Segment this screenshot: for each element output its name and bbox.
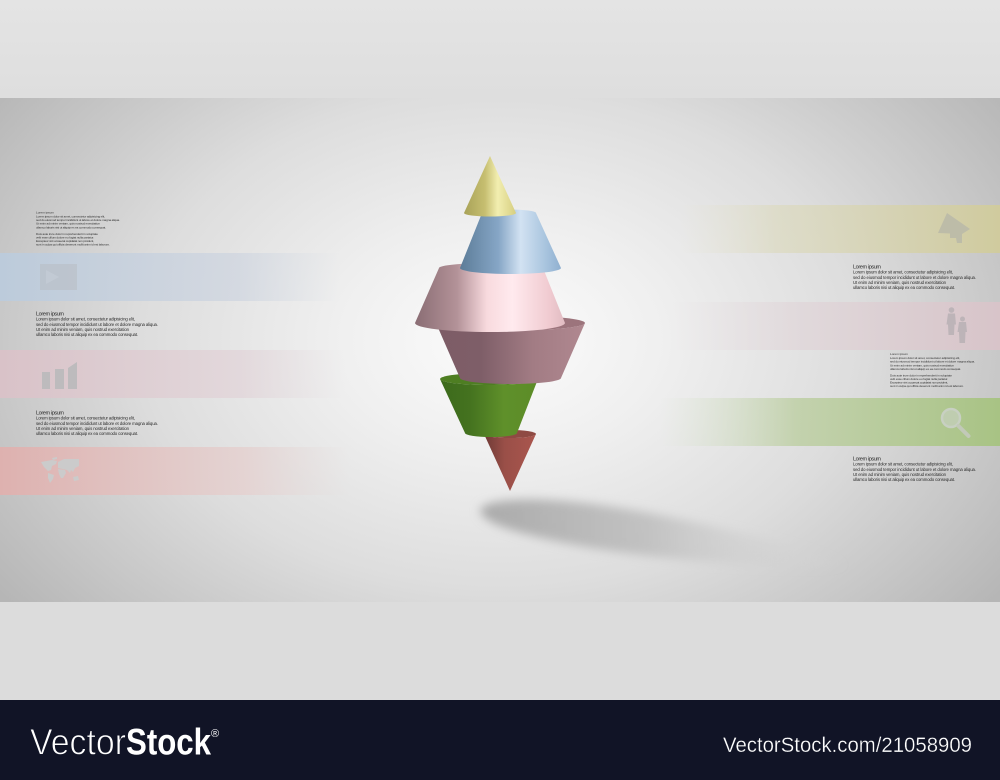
text block: left top small: sed do eiusmod tempor incididunt ut labore et dolore magna aliqua. <box>36 218 120 222</box>
stacked cone diagram <box>415 156 585 491</box>
segment: yellow tip <box>464 156 516 217</box>
text block: left lower: Lorem ipsum dolor sit amet, consectetur adipisicing elit, <box>36 416 135 421</box>
cast shadow <box>480 499 850 567</box>
text block: left lower: Ut enim ad minim veniam, quis nostrud exercitation <box>36 426 130 431</box>
text block: left top small: sunt in culpa qui officia deserunt mollit anim id est laborum. <box>36 242 110 246</box>
text block: right upper: Lorem ipsum dolor sit amet, consectetur adipisicing elit, <box>853 270 953 275</box>
main panel background <box>0 98 1000 602</box>
text block: left lower <box>36 410 158 436</box>
band: left red <box>0 447 350 495</box>
text block: right upper: sed do eiusmod tempor incididunt ut labore et dolore magna aliqua. <box>853 275 976 280</box>
icon: megaphone <box>938 213 970 243</box>
text block: right middle small: Excepteur sint occaecat cupidatat non proident, <box>890 380 948 384</box>
segment: pink <box>415 263 565 332</box>
text block: right lower: ullamco laboris nisi ut aliquip ex ea commodo consequat. <box>853 477 955 482</box>
icon: presentation screen <box>40 264 77 290</box>
icon: bar chart <box>42 362 77 389</box>
footer logo <box>30 722 219 762</box>
segment: mauve <box>436 316 585 384</box>
text block: left top small: velit esse cillum dolore eu fugiat nulla pariatur. <box>36 236 94 240</box>
segment: blue <box>460 210 561 274</box>
text block: right lower <box>853 456 976 482</box>
top margin strip <box>0 0 1000 98</box>
text block: left top small: Lorem ipsum <box>36 210 54 214</box>
segment: green <box>440 373 538 437</box>
text block: right upper <box>853 264 976 290</box>
footer bar <box>0 700 1000 780</box>
text block: left middle: ullamco laboris nisi ut aliquip ex ea commodo consequat. <box>36 332 138 337</box>
band: left blue <box>0 253 340 301</box>
text block: left lower: ullamco laboris nisi ut aliquip ex ea commodo consequat. <box>36 431 138 436</box>
text block: right middle small: Ut enim ad minim veniam, quis nostrud exercitation <box>890 363 954 367</box>
footer logo: Stock <box>126 722 211 762</box>
text block: left top small: Lorem ipsum dolor sit amet, consectetur adipisicing elit, <box>36 214 105 218</box>
text block: right middle small: ullamco laboris nisi ut aliquip ex ea commodo consequat. <box>890 367 961 371</box>
text block: left top small: Duis aute irure dolor in reprehenderit in voluptate <box>36 232 98 236</box>
text block: right upper: Ut enim ad minim veniam, quis nostrud exercitation <box>853 280 947 285</box>
text block: left middle: Ut enim ad minim veniam, quis nostrud exercitation <box>36 327 130 332</box>
text block: left lower: Lorem ipsum <box>36 410 64 416</box>
text block: right middle small: sunt in culpa qui officia deserunt mollit anim id est laborum. <box>890 384 964 388</box>
text block: left middle: sed do eiusmod tempor incididunt ut labore et dolore magna aliqua. <box>36 322 158 327</box>
text block: right lower: Ut enim ad minim veniam, quis nostrud exercitation <box>853 472 947 477</box>
band: right pink <box>670 302 1000 350</box>
text block: right lower: Lorem ipsum <box>853 456 881 462</box>
text block: right lower: sed do eiusmod tempor incididunt ut labore et dolore magna aliqua. <box>853 467 976 472</box>
footer logo: ® <box>211 728 219 740</box>
icon: magnifier <box>942 409 968 436</box>
text block: left lower: sed do eiusmod tempor incididunt ut labore et dolore magna aliqua. <box>36 421 158 426</box>
text block: left top small <box>36 210 120 246</box>
text block: left middle: Lorem ipsum <box>36 312 64 318</box>
bottom margin strip <box>0 602 1000 700</box>
text block: left top small: Excepteur sint occaecat cupidatat non proident, <box>36 239 94 243</box>
text block: left top small: Ut enim ad minim veniam, quis nostrud exercitation <box>36 222 100 226</box>
text block: right middle small: velit esse cillum dolore eu fugiat nulla pariatur. <box>890 377 948 381</box>
footer logo: Vector <box>30 722 126 762</box>
text block: left middle <box>36 312 158 337</box>
segment: red tip <box>484 430 536 491</box>
text block: right middle small: Duis aute irure dolor in reprehenderit in voluptate <box>890 374 952 378</box>
icon: world map <box>41 457 79 483</box>
text block: right middle small: Lorem ipsum dolor sit amet, consectetur adipisicing elit, <box>890 356 960 360</box>
band: left pink <box>0 350 345 398</box>
text block: left top small: ullamco laboris nisi ut aliquip ex ea commodo consequat. <box>36 225 106 229</box>
icon: people <box>946 307 967 343</box>
text block: right middle small: sed do eiusmod tempor incididunt ut labore et dolore magna aliqua. <box>890 360 975 364</box>
text block: left middle: Lorem ipsum dolor sit amet, consectetur adipisicing elit, <box>36 317 135 322</box>
text block: right lower: Lorem ipsum dolor sit amet, consectetur adipisicing elit, <box>853 462 953 467</box>
footer image id: VectorStock.com/21058909 <box>723 734 972 757</box>
text block: right upper: Lorem ipsum <box>853 264 881 270</box>
text block: right middle small: Lorem ipsum <box>890 352 908 356</box>
band: right green <box>660 398 1000 446</box>
text block: right middle small <box>890 352 975 388</box>
text block: right upper: ullamco laboris nisi ut aliquip ex ea commodo consequat. <box>853 285 955 290</box>
band: right yellow <box>680 205 1000 253</box>
